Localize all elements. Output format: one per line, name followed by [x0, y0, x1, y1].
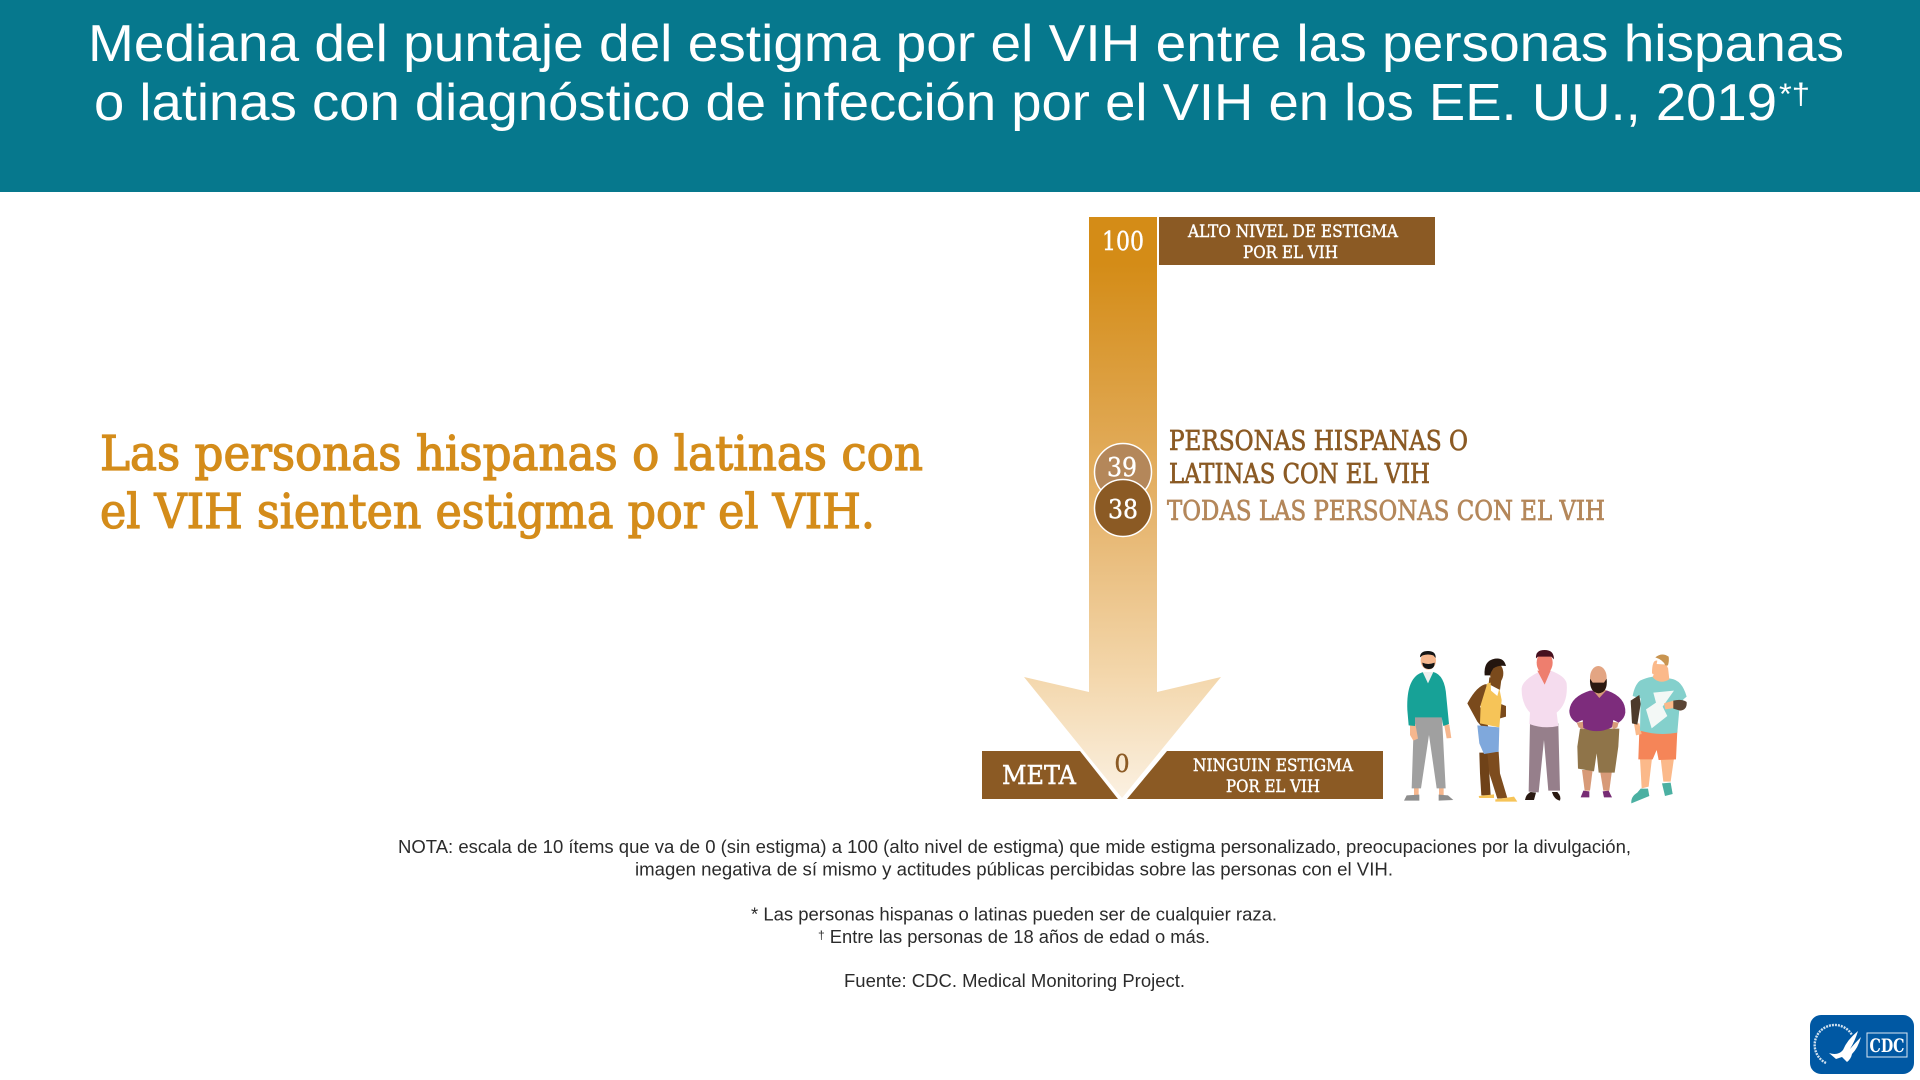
label: no stigma: POR EL VIH [1226, 777, 1320, 797]
notes and source: † [818, 928, 825, 942]
title banner: o latinas con diagnóstico de infección por el VIH en los EE. UU., 2019 [94, 74, 1777, 132]
label: high stigma: ALTO NIVEL DE ESTIGMA [1187, 222, 1399, 242]
stigma scale arrow: 100 [1102, 227, 1144, 257]
illustration: group of five men [1404, 650, 1687, 803]
CDC / HHS logo: CDC [1870, 1035, 1904, 1057]
key message heading: el VIH sienten estigma por el VIH. [100, 484, 875, 540]
marker: 38 [1094, 480, 1152, 536]
person 5 [1631, 654, 1687, 803]
notes and source: NOTA: escala de 10 ítems que va de 0 (sin estigma) a 100 (alto nivel de estigma) que mide estigma personalizado, preocupaciones por la divulgación, [398, 836, 1631, 857]
person 1 [1404, 651, 1453, 801]
key message heading: Las personas hispanas o latinas con [100, 426, 923, 482]
marker: 39 [1094, 444, 1152, 500]
title banner: Mediana del puntaje del estigma por el VIH entre las personas hispanas [88, 15, 1844, 73]
goal box [982, 751, 1118, 799]
label: no stigma [1127, 751, 1383, 799]
notes and source: Fuente: CDC. Medical Monitoring Project. [844, 970, 1185, 991]
title banner: *† [1779, 78, 1810, 111]
label: all people with HIV: TODAS LAS PERSONAS CON EL VIH [1167, 496, 1605, 527]
notes and source: imagen negativa de sí mismo y actitudes públicas percibidas sobre las personas con el VIH. [635, 858, 1393, 880]
title banner [0, 0, 1920, 192]
scale value: 0: 0 [1114, 750, 1130, 778]
label: Hispanic or Latino people [1169, 426, 1468, 490]
goal box: META [1002, 761, 1077, 791]
label: Hispanic or Latino people: PERSONAS HISPANAS O [1169, 426, 1468, 457]
notes and source [398, 836, 1631, 991]
stigma scale arrow [1024, 217, 1221, 798]
CDC / HHS logo [1810, 1015, 1914, 1074]
key message heading [100, 426, 923, 540]
marker: 38: 38 [1108, 495, 1138, 525]
marker: 39: 39 [1107, 453, 1137, 483]
label: high stigma [1159, 217, 1435, 265]
person 2 [1467, 658, 1517, 802]
label: Hispanic or Latino people: LATINAS CON EL VIH [1169, 459, 1430, 490]
notes and source: * Las personas hispanas o latinas pueden ser de cualquier raza. [751, 904, 1277, 924]
person 4 [1569, 666, 1625, 797]
label: high stigma: POR EL VIH [1243, 243, 1338, 263]
notes and source: Entre las personas de 18 años de edad o más. [825, 926, 1210, 947]
label: no stigma: NINGUIN ESTIGMA [1193, 756, 1354, 776]
person 3 [1522, 650, 1567, 801]
